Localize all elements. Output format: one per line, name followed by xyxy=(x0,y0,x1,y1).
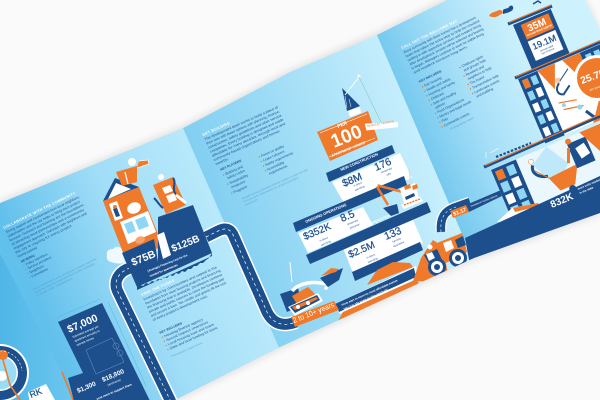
text: call out the welcome mat: Community events xyxy=(443,112,470,128)
figure: $8M: $8M xyxy=(340,171,364,190)
text: collaborate with the community: the city is ongoing for every project xyxy=(15,224,72,255)
figure: 19.1M: 19.1M xyxy=(531,33,558,52)
panel: ongoing operations: temporary xyxy=(346,218,359,226)
text: call out the welcome mat: and resident services long term. xyxy=(413,45,468,75)
text: call out the welcome mat: Every community with these homes has a development xyxy=(403,16,477,54)
text: get building: Building and xyxy=(225,165,243,176)
bulldozer xyxy=(280,262,343,316)
text: call out the welcome mat: After development, tenants will be selected and leasing xyxy=(409,27,484,67)
badge label: RK xyxy=(28,386,43,400)
text: collaborate with the community: engagement approach. Outreach with neighbors and xyxy=(13,211,87,251)
text: collaborate with the community: of attracting local partnerships and a community xyxy=(11,208,85,247)
middle beam xyxy=(515,40,600,78)
small orange house xyxy=(153,174,186,214)
big orange house xyxy=(103,158,160,255)
text: get building: Programs xyxy=(233,185,248,194)
figure: $125B: $125B xyxy=(170,234,201,255)
text: get building: Lease rollovers xyxy=(262,149,285,162)
text: get building: community-based organizations and homes xyxy=(213,129,281,162)
text: call out the welcome mat: Transportation help xyxy=(471,74,499,90)
text: call out the welcome mat: and building xyxy=(476,87,494,98)
text: get building: Focus on quality xyxy=(260,144,285,158)
panel: new construction: in direct xyxy=(353,180,363,188)
coin xyxy=(135,236,145,244)
panel: resident operations xyxy=(306,202,431,281)
text: collaborate with the community: Service providers xyxy=(27,255,52,270)
text: call out the welcome mat: Childcare rights xyxy=(461,54,484,68)
figure: 19.1M: tax revenue xyxy=(541,46,555,55)
text: collaborate with the community: Local housing data estimated from project averages xyxy=(34,261,96,294)
text: call out the welcome mat: KEY INCLUDES xyxy=(418,69,443,84)
text: call out the welcome mat: settling in with supportive services and resident hiring. xyxy=(407,23,482,62)
top beam xyxy=(508,1,552,24)
panel: resident operations: full-time xyxy=(392,236,402,244)
callout: per 100 apartment homes: 100 xyxy=(328,121,365,153)
text: find the funds: and secure a loan. Tax credits and grants fill the rest xyxy=(150,281,227,318)
figure: 35M: annual local spend xyxy=(526,23,552,37)
text: get building: measures xyxy=(231,179,246,189)
residents illustration xyxy=(537,53,600,135)
text: get building: Accessibility xyxy=(266,160,285,172)
figure: 19.1M xyxy=(528,30,563,61)
text: collaborate with the community: housing supported. xyxy=(17,245,38,259)
text: find the funds xyxy=(141,266,226,357)
panel: new construction xyxy=(326,145,412,205)
orange mound xyxy=(367,262,413,285)
figure: $2.5M: $2.5M xyxy=(347,240,377,261)
text: collaborate with the community: forward. Outreach and listening are the foundations xyxy=(9,203,85,242)
text: call out the welcome mat: is begun. Managers continue to work for stable living xyxy=(411,32,485,71)
panel: resident operations: spending xyxy=(367,256,379,264)
figure: 25.7M xyxy=(574,55,600,101)
text: call out the welcome mat: Resident and xyxy=(465,65,485,77)
text: get building: Sustainability xyxy=(229,173,249,185)
panel: ongoing operations: spending xyxy=(320,239,332,247)
text: call out the welcome mat: Health and safety xyxy=(426,77,452,92)
panel: resident operations: RESIDENT OPERATIONS xyxy=(351,212,394,234)
text: get building: affordable for many decades, through local and xyxy=(211,122,286,158)
panel: resident operations: in direct xyxy=(366,252,376,260)
worker with wheelbarrow xyxy=(526,138,587,204)
panel: ongoing operations: jobs/year xyxy=(348,222,360,230)
text: call out the welcome mat: neighbors to help xyxy=(467,66,492,81)
figure: $352K: $352K xyxy=(302,221,333,243)
funding block: (Average) Financing cost for the xyxy=(147,253,188,273)
text: get building: companies. Every building is designed and made xyxy=(209,118,284,154)
blueprint block: Estimated average per xyxy=(72,324,99,339)
band and label: 2 to 10+ years: From start to move-in, most affordable homes xyxy=(341,278,399,307)
crane xyxy=(342,74,381,122)
text: call out the welcome mat: options xyxy=(434,101,446,110)
text: call out the welcome mat: Safe and healthy xyxy=(432,91,457,106)
label: resident heights xyxy=(364,120,398,130)
funding block: needed for apartments xyxy=(149,263,179,278)
text: get building: Safety requirements xyxy=(264,151,294,167)
text: collaborate with the community: Strong support and involvement from local neighbors, xyxy=(5,195,80,234)
text: call out the welcome mat: Money and legal needs xyxy=(439,100,472,119)
text: find the funds: Photography: project funds xyxy=(170,340,204,358)
text: get building xyxy=(202,106,308,206)
text: call out the welcome mat: Housing and family xyxy=(428,80,456,97)
text: call out the welcome mat: Fair housing xyxy=(424,76,442,88)
callout: per 100 apartment homes: PER xyxy=(337,120,349,130)
text: get building: KEY PLAYERS xyxy=(219,158,243,172)
band and label: 2 to 10+ years: 2 to 10+ years xyxy=(291,300,336,325)
text: get building: requirements xyxy=(268,164,288,176)
text: find the funds: FIND THE FUNDS xyxy=(141,278,176,297)
text: call out the welcome mat: Pets xyxy=(441,116,449,123)
band and label: 2 to 10+ years: take 2 to 10+ years to plan and build xyxy=(343,288,389,311)
figure: 8.5: 8.5 xyxy=(338,208,357,225)
text: call out the welcome mat: and groups help xyxy=(463,58,487,72)
roof xyxy=(103,178,139,201)
truck road xyxy=(441,202,470,232)
panel: new construction: jobs xyxy=(385,171,392,177)
figure: $1,300: $1,300 xyxy=(76,380,97,395)
upper window person xyxy=(109,201,123,221)
panel: new construction: NEW CONSTRUCTION xyxy=(340,152,379,172)
text: find the funds: the financing that is available. Developers combine xyxy=(146,273,223,310)
label: $1.17: Invested in homes returns xyxy=(470,194,499,208)
figure: $18,800: $18,800 xyxy=(101,368,126,384)
white ledge blocks xyxy=(515,90,541,144)
panel: resident operations: equivalent xyxy=(392,240,405,248)
door windows xyxy=(120,211,156,244)
panel: left flap xyxy=(0,253,78,400)
text: get building: construction, safety guidelines and other service xyxy=(207,113,282,150)
icon: orange and navy cloud xyxy=(489,6,513,17)
text: call out the welcome mat xyxy=(401,16,500,130)
text: collaborate with the community: COLLABORATE WITH THE COMMUNITY xyxy=(3,191,77,230)
text: collaborate with the community xyxy=(3,192,96,296)
text: collaborate with the community: Policy members xyxy=(25,252,49,266)
dump truck xyxy=(424,233,467,276)
text: call out the welcome mat: Photography notes xyxy=(449,116,475,131)
figure: 35M: 35M xyxy=(526,17,548,34)
road left xyxy=(116,268,172,400)
excavator xyxy=(374,169,423,216)
blueprint block: apartment annually to xyxy=(74,329,101,343)
tower top xyxy=(513,9,571,72)
text: get building: nearby. xyxy=(215,157,229,166)
navy ground band: in the state xyxy=(579,185,594,195)
text: call out the welcome mat: Food Organizations xyxy=(437,98,465,114)
text: find the funds: private and public sources to close the funding gap xyxy=(148,277,225,314)
orange ground xyxy=(333,279,425,330)
text: call out the welcome mat: Childcare xyxy=(430,91,445,101)
text: find the funds: Housing finance agency xyxy=(164,317,204,338)
figure: 176: 176 xyxy=(372,156,393,174)
text: get building: safety codes xyxy=(226,169,246,180)
callout: per 100 apartment homes: APARTMENT HOMES* xyxy=(331,140,367,158)
text: find the funds: Local housing trust and loans xyxy=(167,322,215,346)
lower beam xyxy=(484,114,600,167)
panel: welcome mat xyxy=(377,0,600,262)
text: find the funds: Investment by communities and capital is the xyxy=(143,265,218,301)
text: call out the welcome mat: Landscape events xyxy=(474,79,500,94)
panel: ongoing operations xyxy=(293,176,407,253)
text: collaborate with the community: stakeholders and the city helps to bring each project xyxy=(7,200,81,238)
text: get building: The development team works to build a place of xyxy=(204,105,279,141)
text: call out the welcome mat: The board xyxy=(469,75,485,85)
panel: ongoing operations: in direct xyxy=(319,235,329,243)
text: get building: GET BUILDING xyxy=(202,121,231,137)
figure: 133: 133 xyxy=(382,225,403,243)
figure: 35M xyxy=(521,13,554,40)
blueprint block: operate homes xyxy=(76,336,95,347)
navy ground band xyxy=(465,176,600,265)
panel: get building xyxy=(183,35,480,350)
text: get building: Construction data based on project averages xyxy=(242,175,300,204)
label: $1.17: $1.17 xyxy=(453,207,468,218)
callout: per 100 apartment homes xyxy=(317,111,378,161)
panel: new construction: spending xyxy=(354,184,366,192)
text: find the funds: KEY INCLUDES xyxy=(159,321,184,335)
orange wedge under truck xyxy=(413,240,450,282)
text: call out the welcome mat: CALL OUT THE WELCOME MAT xyxy=(401,19,459,50)
text: collaborate with the community: Source: national housing survey on funding and community support data xyxy=(32,257,98,291)
panel: collaborate xyxy=(0,128,290,400)
figure: 832K: 832K xyxy=(549,191,576,211)
white cloud sheep xyxy=(107,247,125,264)
circle badge xyxy=(0,344,29,400)
text: collaborate with the community: Committees xyxy=(31,267,49,278)
text: find the funds: State and local funding for loans xyxy=(169,326,218,351)
text: find the funds: Social impact investors xyxy=(165,320,209,342)
blueprint block xyxy=(56,299,152,400)
text: call out the welcome mat: team that takes the extra step to help the resident xyxy=(405,19,480,58)
road right xyxy=(206,229,296,324)
piggy bank xyxy=(127,202,141,214)
text: get building: their own with fewer options with planning, finance, xyxy=(206,109,280,146)
tower middle xyxy=(518,38,600,143)
family at kitchen xyxy=(559,123,600,174)
text: collaborate with the community: SEVERAL xyxy=(20,253,36,264)
label: $1.17 xyxy=(450,190,502,218)
panel: new construction: temporary xyxy=(380,166,393,174)
figure: $7,000: $7,000 xyxy=(65,312,100,336)
figure: 19.1M: annual state xyxy=(539,43,555,53)
text: collaborate with the community: Local city statistics xyxy=(36,276,74,297)
text: find the funds: of every project's development cost. xyxy=(152,294,208,322)
person on roof xyxy=(116,158,149,186)
pencil xyxy=(62,372,74,400)
band and label: 2 to 10+ years xyxy=(291,266,418,327)
badge label xyxy=(28,384,55,400)
figure: $75B: $75B xyxy=(130,248,158,269)
blueprint block: (ave/home) xyxy=(107,378,121,387)
funding block xyxy=(122,205,212,290)
text: get building: National housing construction estimate, updates on state cost data xyxy=(241,167,309,200)
label: resident heights: RESIDENT HEIGHTS xyxy=(366,119,394,128)
text: find the funds: foundation from most housing projects and financing xyxy=(145,269,221,306)
text: get building: research xyxy=(244,197,259,207)
text: collaborate with the community: Neighbors xyxy=(29,264,45,274)
tower lower xyxy=(491,123,600,222)
panel: ongoing operations: ONGOING OPERATIONS xyxy=(305,203,348,224)
